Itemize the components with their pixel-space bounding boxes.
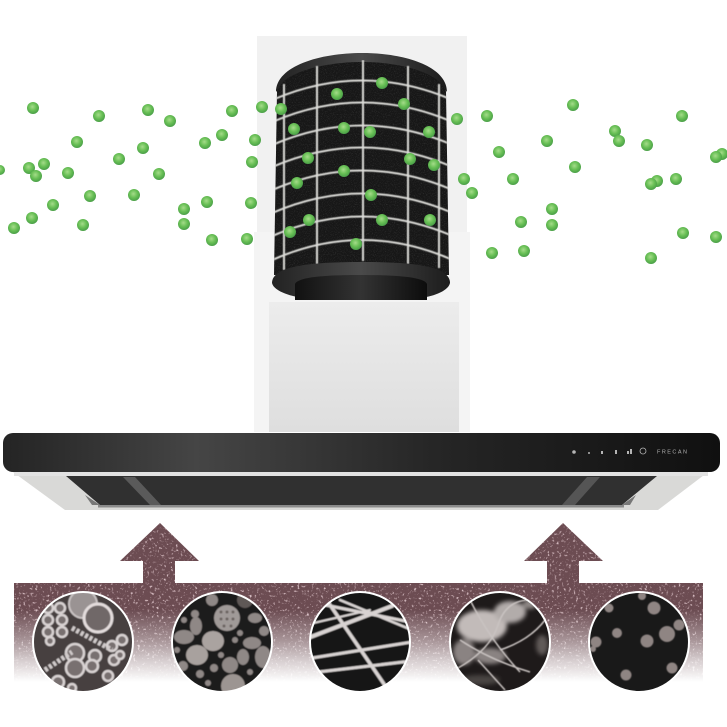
- particle band with arrows: [14, 523, 703, 685]
- right filter slot: [562, 477, 600, 505]
- control panel icons: [572, 448, 646, 454]
- circle: fine particles: [587, 590, 691, 694]
- circle: mold spores: [30, 590, 136, 696]
- green air particles: [0, 77, 727, 264]
- carbon filter cylinder: [270, 53, 455, 300]
- hood dark intake panel: [66, 476, 657, 505]
- hood black front bar: [3, 433, 720, 472]
- filter bottom collar: [295, 275, 427, 300]
- circle: fibres: [309, 591, 411, 691]
- circle: dust web: [448, 590, 552, 694]
- range hood: [3, 433, 720, 510]
- light strip: [14, 472, 708, 476]
- filter top rim: [276, 53, 447, 92]
- chimney duct: [254, 36, 470, 432]
- filter bottom band: [272, 262, 450, 298]
- filter foam body: [274, 60, 449, 275]
- brand name: FRECAN: [657, 450, 687, 456]
- left filter slot: [123, 477, 161, 505]
- circle: pollen grains: [170, 590, 274, 698]
- hood silver underside: [13, 472, 708, 510]
- filter white grid: [270, 60, 455, 270]
